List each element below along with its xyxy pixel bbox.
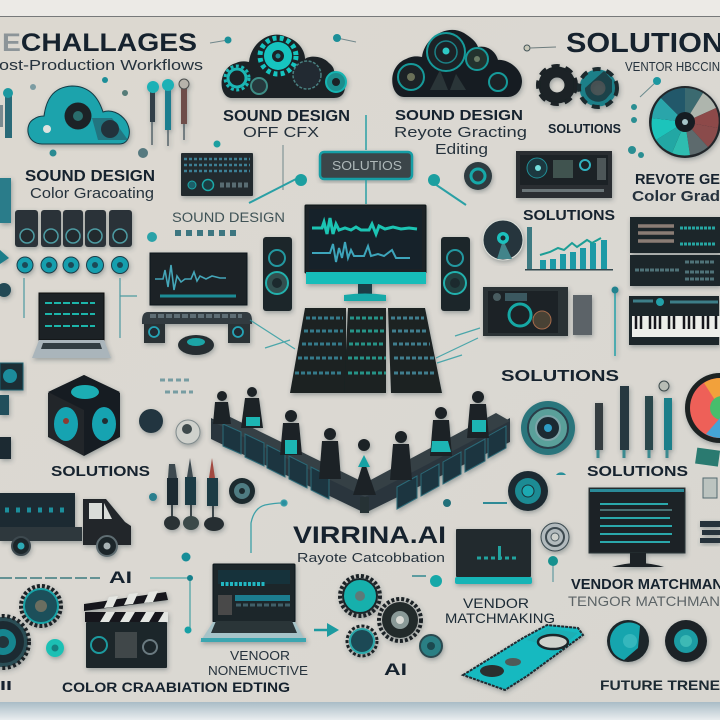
icon: teal dial right <box>665 620 707 662</box>
decorative teal dots near wheel <box>628 77 661 158</box>
teal connector lines to stage <box>160 320 480 392</box>
label: solutions right: SOLUTIONS <box>587 464 688 480</box>
callout: solutions sign <box>320 152 412 179</box>
icon: video rack <box>516 151 612 198</box>
label: vendor matchmaking centre <box>445 595 555 626</box>
label: solutions small: SOLUTIONS <box>548 121 621 136</box>
icon: teal pins <box>412 556 558 587</box>
chart: colour wheel <box>649 86 720 158</box>
chart: multicolour ring <box>685 373 720 443</box>
label: vendor non-executive: NONEMUCTIVE <box>208 664 308 678</box>
chart: stage with figures <box>211 387 510 513</box>
icon: dark cloud with teal gears <box>222 35 346 98</box>
icon: knob row <box>15 210 132 274</box>
teal link dots <box>210 34 356 190</box>
icon: waveform monitor left <box>150 253 247 305</box>
chart: bar trend <box>525 227 613 270</box>
icon: presentation tablet <box>455 529 532 584</box>
connector teal pins <box>214 115 466 205</box>
icon: disc <box>483 220 523 260</box>
label: future trends: FUTURE TRENE <box>600 677 720 693</box>
label: sound design off cfx <box>223 108 350 141</box>
icon: central mixing panels <box>290 308 442 393</box>
icon: spiral knob <box>464 162 492 190</box>
icon: probes <box>147 79 189 146</box>
label: sound design colour grading: SOUND DESIGN <box>25 168 155 185</box>
icon: bottom connectors <box>443 472 566 507</box>
label: sound design mid: SOUND DESIGN <box>172 210 285 225</box>
label: ai left: AI <box>109 568 132 587</box>
label: colour graduation editing: COLOR CRAABIATION EDTING <box>62 680 290 695</box>
label: vendor non-executive: VENOOR <box>230 648 290 663</box>
label: ai bottom left: II <box>0 678 12 693</box>
label: remote grading: Color Grad <box>632 188 720 205</box>
label: sound design remote grading editing: SOUND DESIGN <box>395 107 523 124</box>
label: solutions chart: SOLUTIONS <box>523 208 615 224</box>
icon: gears left <box>0 586 64 668</box>
label: sound design mid <box>147 210 285 242</box>
icon: concentric dial <box>521 401 575 455</box>
label: virrina ai <box>293 522 446 565</box>
icon: piano keyboard <box>612 286 720 356</box>
icon: speakers mixer <box>142 312 252 355</box>
label: sound design remote grading editing: Editing <box>435 141 488 158</box>
label: sound design off cfx: OFF CFX <box>243 124 319 141</box>
icon: small tag right <box>695 448 720 498</box>
label: sound design off cfx: SOUND DESIGN <box>223 108 350 125</box>
title: challenges: ECHALLAGES <box>2 29 197 57</box>
label: virrina ai: VIRRINA.AI <box>293 522 446 549</box>
label: sound design colour grading <box>25 168 155 202</box>
icon: pin line <box>524 45 556 51</box>
icon: central monitor <box>305 205 426 301</box>
label: vendor matchmaking centre: MATCHMAKING <box>445 610 555 626</box>
icon: dial small <box>508 471 548 511</box>
label: vendor matchmaking right: TENGOR MATCHMAN <box>568 593 720 609</box>
title: challenges: ost-Production Workflows <box>0 58 203 74</box>
chart: vertical strips <box>595 381 672 458</box>
left edge fragments <box>0 178 23 459</box>
icon: laptop <box>32 293 111 358</box>
icon: gears pair <box>538 66 617 107</box>
icon: disc ring <box>541 523 569 551</box>
label: sound design remote grading editing: Reyote Gracting <box>394 124 527 141</box>
label: remote grading: REVOTE GE <box>635 172 720 188</box>
icon: left probe <box>0 77 148 158</box>
label: solutions left: SOLUTIONS <box>51 464 150 480</box>
icon: mixer rack <box>181 153 253 196</box>
label: vendor matchmaking right <box>568 577 720 609</box>
icon: tools <box>149 458 224 531</box>
icon: teal cloud <box>28 86 129 144</box>
icon: teal arrow <box>314 623 339 637</box>
icon: second dark cloud <box>392 30 522 97</box>
icon: control rack right <box>630 217 720 286</box>
callout: solutions sign: SOLUTIOS <box>332 158 402 173</box>
icon: cube <box>48 375 120 456</box>
icon: clapperboard <box>84 591 168 668</box>
icon: teal dial left <box>607 620 649 662</box>
heading: solutions <box>566 27 720 74</box>
label: solutions centre right: SOLUTIONS <box>501 368 619 385</box>
icon: teal slab <box>463 625 583 690</box>
heading: solutions: SOLUTION <box>566 27 720 58</box>
icon: truck <box>0 493 131 556</box>
label: vendor matchmaking centre: VENDOR <box>463 595 529 611</box>
icon: desktop monitor code <box>589 488 685 567</box>
icon: laptop video <box>200 564 306 642</box>
dashed line left <box>0 577 100 579</box>
title: challenges <box>0 29 203 74</box>
label: sound design remote grading editing <box>394 107 527 158</box>
icon: speaker left <box>263 237 292 311</box>
icon: sphere and dial <box>139 409 200 444</box>
label: vendor non-executive <box>208 648 308 678</box>
icon: central gears <box>340 576 442 657</box>
label: sound design colour grading: Color Gracoating <box>30 186 154 202</box>
connector pin <box>150 500 287 634</box>
label: vendor matchmaking right: VENDOR MATCHMAN <box>571 577 720 593</box>
icon: control desk <box>483 287 592 336</box>
icon: speaker right <box>441 237 470 311</box>
icon: round dial small <box>229 478 255 504</box>
label: virrina ai: Rayote Catcobbation <box>297 551 445 565</box>
label: ai centre: AI <box>384 660 407 679</box>
icon: stacked discs far right <box>700 521 720 543</box>
vertical ties <box>24 278 137 338</box>
label: remote grading <box>632 172 720 205</box>
